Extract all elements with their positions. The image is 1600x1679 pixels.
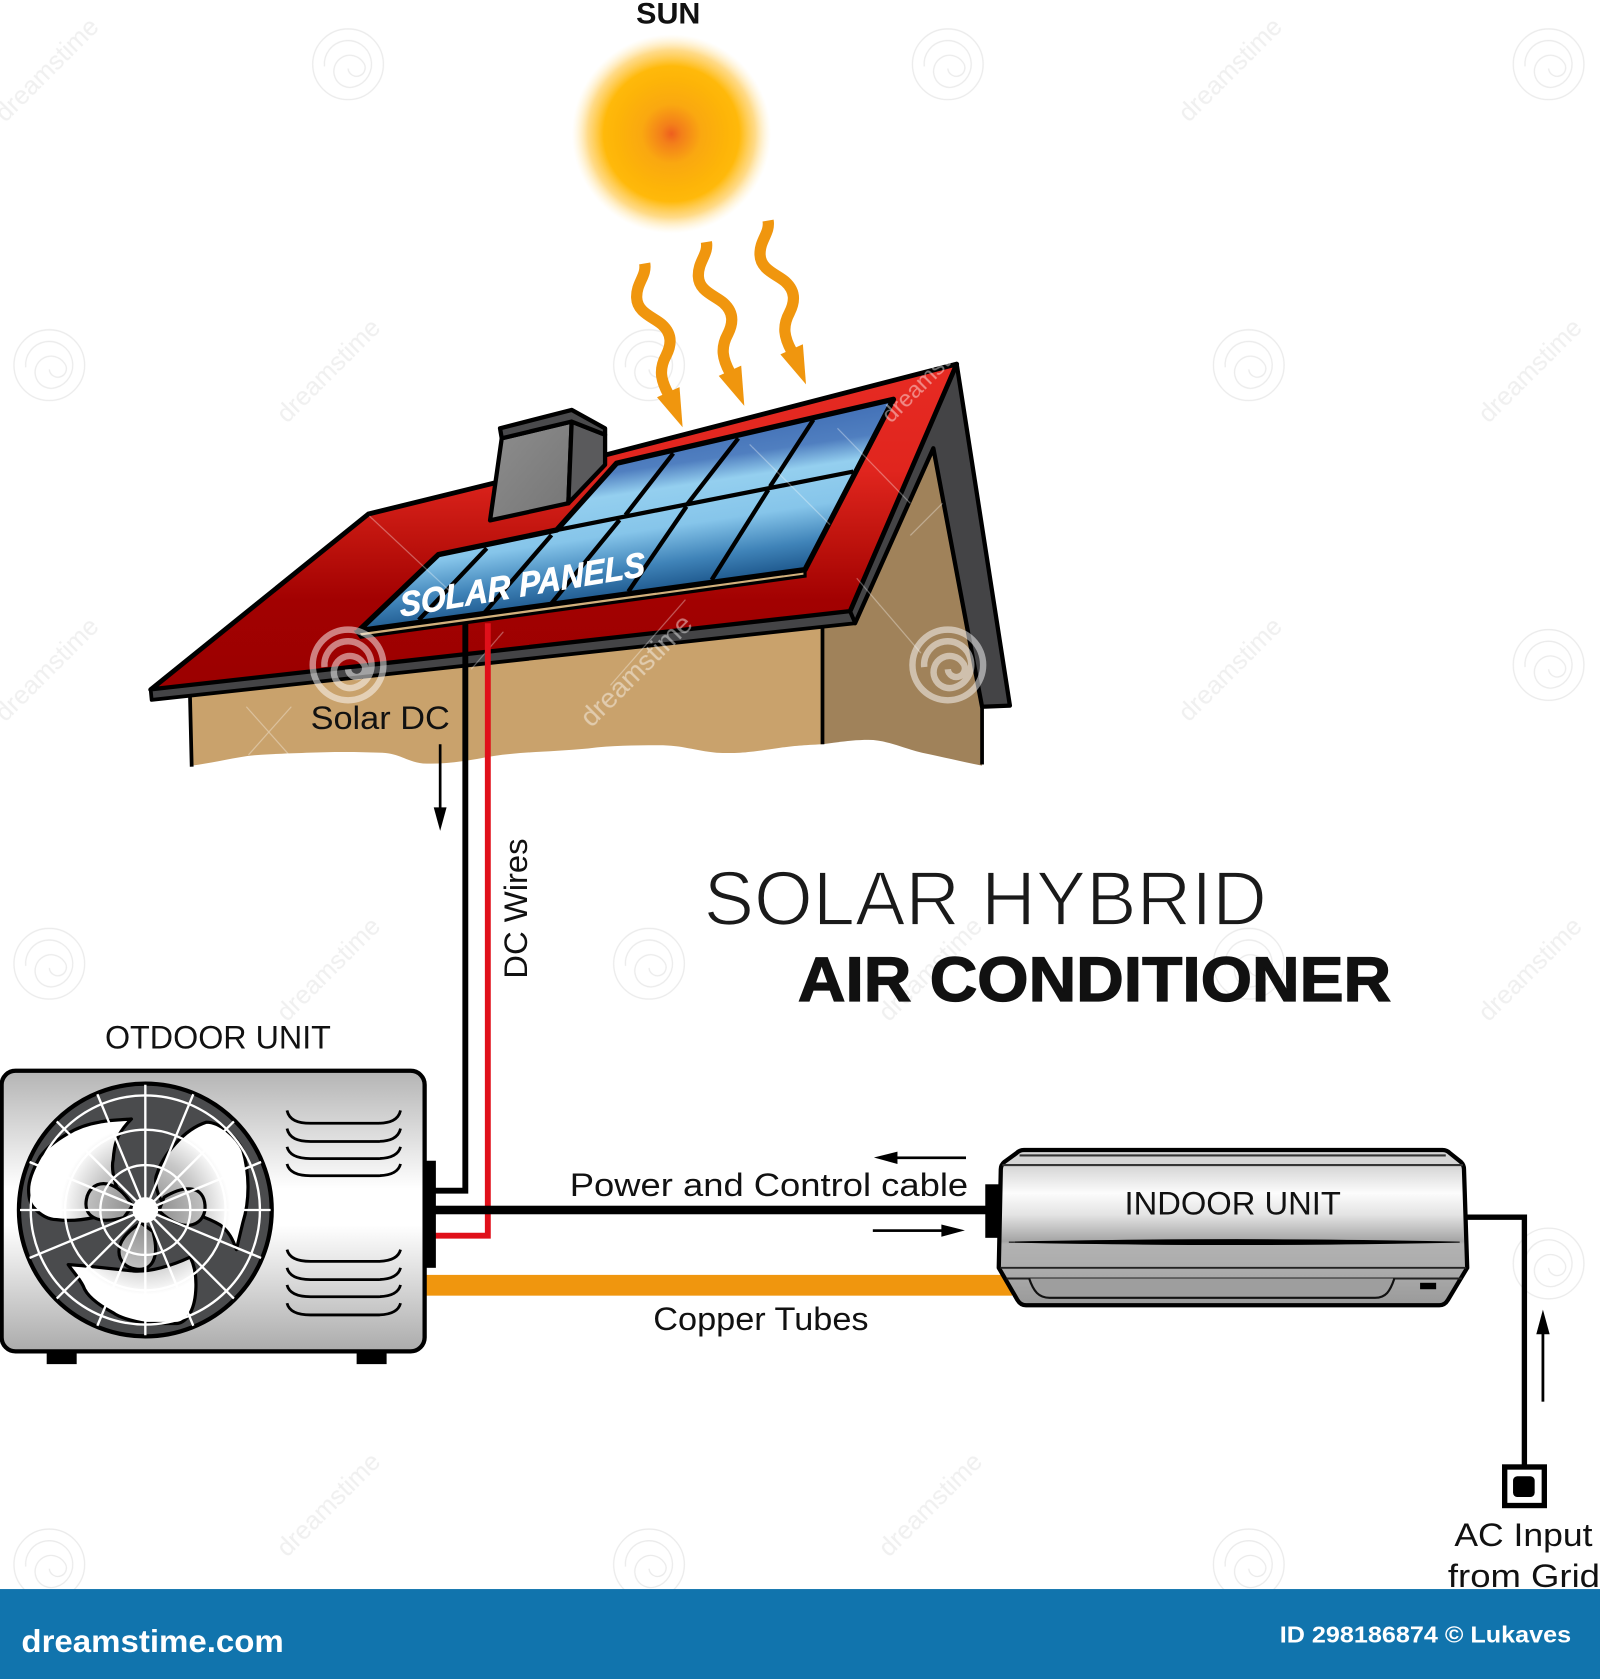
text: dreamstime — [573, 608, 698, 732]
label: Solar DC: Solar DC — [311, 700, 450, 736]
house side wall — [822, 448, 982, 766]
footer logo text: dreamstime.com — [21, 1624, 284, 1659]
arrow: toward indoor unit — [873, 1224, 965, 1237]
arrow: AC input direction — [1536, 1310, 1550, 1402]
icon: heat arrows from the sun — [637, 221, 806, 427]
front slit — [1009, 1240, 1460, 1245]
roof fascia — [151, 611, 855, 700]
chimney — [490, 410, 605, 520]
arrow: heat ray 3 — [760, 221, 806, 384]
label: SOLAR PANELS: SOLAR PANELS — [399, 546, 646, 625]
footer banner — [0, 1589, 1600, 1679]
fan — [19, 1084, 272, 1336]
text: dreamstime — [873, 1448, 988, 1562]
text: dreamstime — [873, 912, 988, 1027]
label: Copper Tubes: Copper Tubes — [653, 1301, 869, 1337]
fan guard grille — [20, 1085, 271, 1335]
text: dreamstime — [271, 1448, 386, 1562]
gable trim — [850, 364, 1010, 707]
arrow: solar DC direction — [434, 744, 447, 831]
fan blades — [29, 1119, 248, 1323]
air flap — [1029, 1279, 1394, 1298]
text: dreamstime — [1473, 314, 1588, 428]
title line 1: SOLAR HYBRID — [704, 856, 1267, 942]
text: dreamstime — [271, 912, 386, 1027]
power and control cable — [434, 1206, 986, 1214]
house front wall — [190, 627, 822, 766]
indoor unit body — [999, 1150, 1467, 1305]
label: AC Input from Grid: from Grid — [1448, 1558, 1600, 1594]
wires: solar DC black — [434, 623, 465, 1191]
footer id text: ID 298186874 © Lukaves — [1280, 1622, 1571, 1648]
lower panel lines — [1000, 1268, 1466, 1279]
label: OTDOOR UNIT: OTDOOR UNIT — [105, 1019, 331, 1055]
label: AC Input from Grid — [1448, 1517, 1600, 1594]
title line 2: AIR CONDITIONER — [798, 945, 1391, 1015]
indoor unit connector — [985, 1184, 1001, 1238]
outdoor unit — [2, 1071, 436, 1364]
label: Power and Control cable: Power and Control cable — [570, 1167, 968, 1203]
title — [704, 856, 1391, 1015]
text: dreamstime — [1173, 13, 1288, 127]
label: AC Input from Grid: AC Input — [1454, 1517, 1593, 1553]
panel ledge — [357, 570, 805, 637]
arrow: toward outdoor unit — [874, 1152, 966, 1164]
solar panels — [359, 399, 893, 631]
copper tubes — [425, 1275, 1012, 1296]
top strip — [1002, 1155, 1463, 1165]
label: DC Wires: DC Wires — [498, 838, 534, 979]
label: INDOOR UNIT: INDOOR UNIT — [1124, 1185, 1341, 1221]
house with solar roof — [151, 364, 1010, 767]
arrow: heat ray 1 — [637, 263, 683, 427]
panel grid lines — [419, 420, 853, 620]
outdoor unit connector — [424, 1161, 436, 1268]
text: dreamstime — [876, 322, 982, 428]
icon: sun — [572, 34, 771, 233]
indoor unit — [985, 1150, 1467, 1305]
outdoor unit feet — [47, 1351, 387, 1364]
outdoor unit casing — [2, 1071, 425, 1351]
vents — [287, 1110, 401, 1315]
indicator — [1420, 1283, 1436, 1289]
icon: wall socket — [1505, 1467, 1544, 1506]
text: dreamstime — [1473, 912, 1588, 1027]
arrow: heat ray 2 — [698, 242, 744, 406]
text: dreamstime — [271, 314, 386, 428]
text: dreamstime — [1173, 612, 1288, 727]
AC input wire — [1466, 1217, 1524, 1469]
wires: solar DC red — [434, 623, 488, 1236]
red roof — [151, 364, 957, 690]
